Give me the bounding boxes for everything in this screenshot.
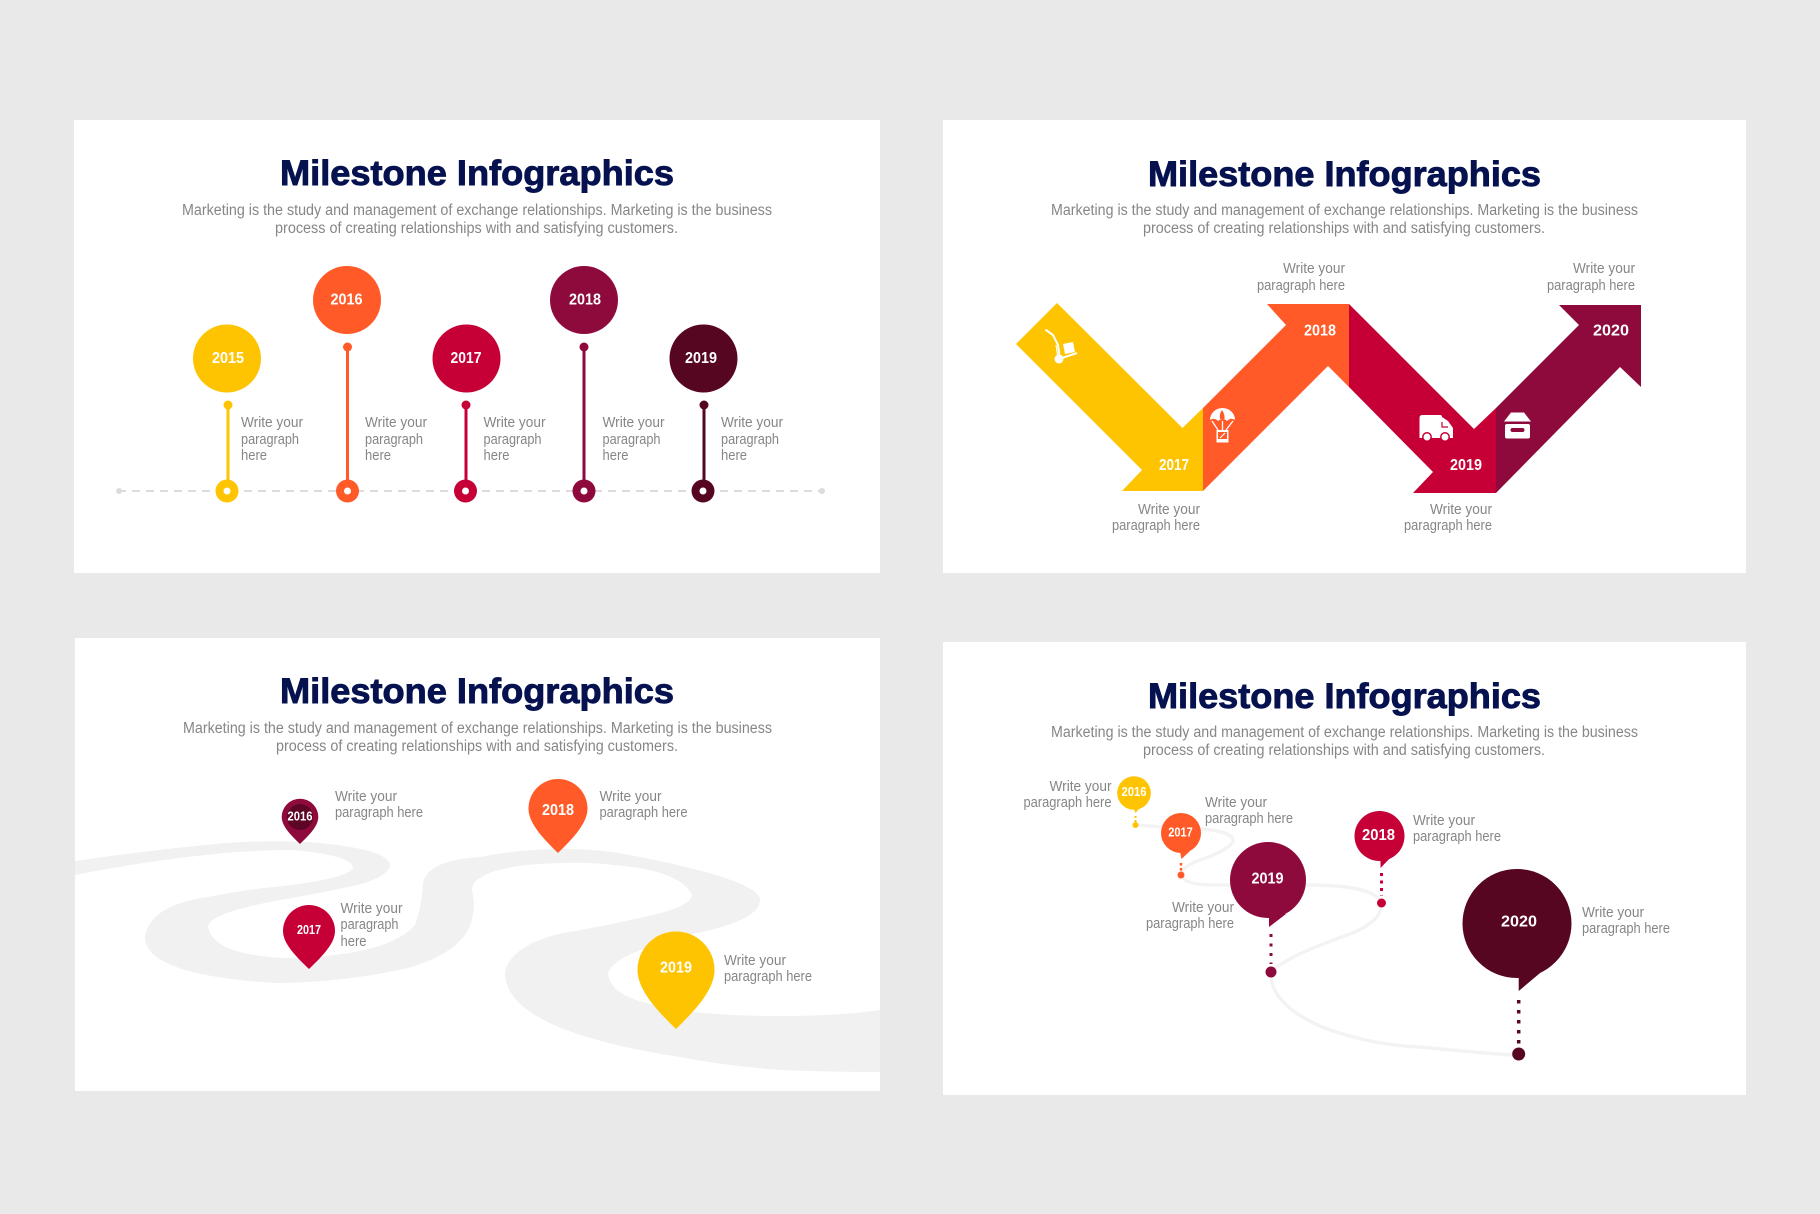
label 2019 [1146,900,1234,932]
label 2020 top: Write your [1573,261,1635,277]
label 2018: Write your [600,789,662,805]
label 2020: paragraph here [1582,921,1670,937]
label 2020 top [1547,261,1635,294]
subtitle: Marketing is the study and management of exchange relationships. Marketing is the business [1051,724,1638,741]
panel: zigzag arrows [943,120,1746,573]
icon: delivery truck [1420,415,1453,441]
bubble 2016: 2016 [1122,785,1147,799]
label 2020 [1582,905,1670,937]
faint connecting path [1135,825,1514,1055]
bubble 2017 [1161,813,1201,878]
bubble 2019 [1230,842,1306,978]
label 2017: here [340,934,366,950]
label 2018 top: Write your [1283,261,1345,277]
label 2018: Write your [602,415,665,431]
pin 2018 [528,779,588,853]
subtitle [1051,724,1638,759]
label 2019: paragraph here [724,969,812,985]
label 2019 bottom: Write your [1430,502,1492,518]
label 2019: Write your [724,953,786,969]
subtitle [183,720,772,755]
label 2018 [602,415,665,464]
bubble 2019: 2019 [1252,870,1284,888]
subtitle: Marketing is the study and management of exchange relationships. Marketing is the business [183,720,772,737]
label 2017: paragraph [484,432,542,448]
label 2019 bottom [1404,502,1492,534]
icon: parachute [1210,408,1235,442]
milestone 2016 [313,266,381,502]
pin 2018: 2018 [542,802,574,819]
title: Milestone Infographics [1148,677,1541,716]
title: Milestone Infographics [1148,155,1541,194]
panel: pin timeline [74,120,880,573]
infographic canvas [74,120,1746,1095]
label 2016: Write your [1050,779,1112,795]
label 2019: Write your [1172,900,1234,916]
arrow: yellow 2017: 2017 [1159,457,1189,474]
panel: growing bubbles [943,642,1746,1095]
subtitle: process of creating relationships with and satisfying customers. [1143,220,1545,237]
label 2016 [365,415,427,464]
milestone 2015: 2015 [212,350,244,367]
winding road ribbon [75,841,880,1072]
label 2018 [1413,813,1501,845]
label 2016 [335,789,423,821]
label 2019: Write your [721,415,783,431]
label 2018 top: paragraph here [1257,278,1345,294]
label 2015: here [241,448,267,464]
bubble 2017: 2017 [1168,824,1193,840]
label 2020: Write your [1582,905,1644,921]
label 2019 [721,415,783,464]
label 2017: here [484,448,510,464]
icon: hand truck [1046,330,1077,364]
arrow: orange 2018: 2018 [1304,322,1336,340]
label 2016: paragraph here [1024,795,1112,811]
label 2017: Write your [1205,795,1267,811]
subtitle: Marketing is the study and management of exchange relationships. Marketing is the business [1051,202,1638,219]
arrow: red 2019 [1349,304,1496,493]
label 2019: paragraph [721,432,779,448]
bubble 2018 [1354,811,1404,908]
arrow: red 2019: 2019 [1450,457,1482,474]
label 2015 [241,415,303,464]
milestone 2017 [432,324,500,502]
label 2018 top [1257,261,1345,294]
subtitle [182,202,772,237]
subtitle [1051,202,1638,237]
label 2017 [1205,795,1293,827]
label 2017: Write your [484,415,546,431]
label 2019 bottom: paragraph here [1404,518,1492,534]
label 2017 bottom: paragraph here [1112,518,1200,534]
label 2017 [484,415,546,464]
label 2016: Write your [365,415,427,431]
label 2017: paragraph here [1205,811,1293,827]
label 2017 [340,901,403,950]
panel: winding road [75,638,880,1091]
label 2017: Write your [340,901,403,917]
pin 2016 [282,799,318,844]
arrow: purple 2020: 2020 [1593,322,1629,340]
label 2019: here [721,448,747,464]
subtitle: Marketing is the study and management of exchange relationships. Marketing is the business [182,202,772,219]
label 2018: paragraph here [600,805,688,821]
label 2016: paragraph [365,432,423,448]
bubble 2018: 2018 [1362,827,1395,844]
label 2016: Write your [335,789,397,805]
arrow: purple 2020 [1496,305,1641,493]
subtitle: process of creating relationships with and satisfying customers. [276,738,678,755]
label 2017 bottom: Write your [1138,502,1200,518]
arrow: yellow 2017 [1016,303,1203,491]
pin 2017 [283,905,335,969]
label 2018: paragraph [602,432,660,448]
pin 2017: 2017 [297,922,321,937]
milestone 2018 [550,266,618,502]
milestone 2019 [670,324,738,502]
label 2017 bottom [1112,502,1200,534]
subtitle: process of creating relationships with and satisfying customers. [275,220,678,237]
milestone 2018: 2018 [569,292,601,308]
milestone 2017: 2017 [450,350,482,367]
title: Milestone Infographics [280,672,674,711]
bubble 2020: 2020 [1501,914,1537,930]
label 2016 [1024,779,1112,811]
bubble 2020 [1462,869,1572,1060]
pin 2019 [638,932,714,1029]
label 2015: Write your [241,415,303,431]
label 2018: Write your [1413,813,1475,829]
arrow: orange 2018 [1203,304,1349,491]
label 2015: paragraph [241,432,299,448]
dashed timeline axis [116,488,825,494]
label 2019 [724,953,812,985]
icon: storage box [1504,412,1531,438]
label 2016: paragraph here [335,805,423,821]
subtitle: process of creating relationships with and satisfying customers. [1143,742,1545,759]
label 2019: paragraph here [1146,916,1234,932]
label 2018: here [602,448,628,464]
milestone 2015 [193,324,261,502]
milestone 2019: 2019 [685,350,717,367]
label 2018 [600,789,688,821]
pin 2019: 2019 [660,960,692,976]
milestone 2016: 2016 [330,292,363,308]
bubble 2016 [1117,776,1151,828]
label 2020 top: paragraph here [1547,278,1635,294]
label 2016: here [365,448,391,464]
label 2017: paragraph [340,917,398,933]
label 2018: paragraph here [1413,829,1501,845]
pin 2016: 2016 [288,808,312,824]
title: Milestone Infographics [280,154,674,193]
